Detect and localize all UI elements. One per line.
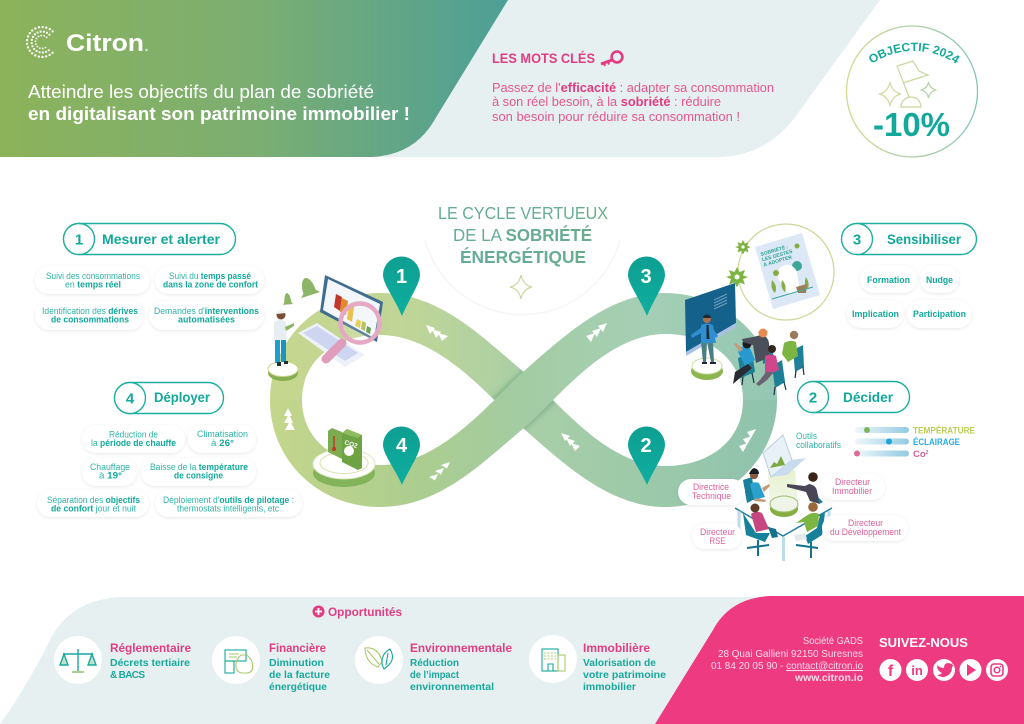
opportunity: immobilière: immobilier [583, 682, 636, 693]
panel: header gradient banner [0, 0, 508, 157]
pin 1 [383, 256, 420, 316]
arrow: right upward [739, 429, 756, 452]
social icons [880, 659, 1008, 681]
icon: keyboard [298, 323, 365, 367]
opportunity: financière: énergétique [269, 682, 327, 693]
legend: sliders: Co [913, 449, 926, 460]
opportunity: environnementale: environnemental [410, 682, 494, 693]
opportunity: financière: de la facture [269, 670, 330, 681]
arrow: bottom left [429, 462, 450, 480]
tag: en temps réel [65, 280, 121, 290]
heading: 3 sensibiliser [842, 224, 976, 254]
badge: objectif 2024 [846, 25, 978, 158]
heading: 2 décider: 2 [809, 390, 817, 406]
heading: 1 mesurer et alerter [64, 224, 236, 254]
tag [35, 266, 150, 294]
title circle decoration [425, 240, 620, 315]
icon: instagram [986, 659, 1008, 681]
tag [37, 490, 149, 517]
tag: de consommations [51, 314, 129, 326]
pin 2: 2 [640, 435, 652, 457]
legend: sliders [854, 426, 975, 460]
heading: 2 décider [798, 382, 910, 412]
panel: measure tags [35, 266, 264, 330]
tag: directeur RSE: RSE [710, 536, 726, 547]
tag: thermostats intelligents, etc [177, 504, 279, 514]
tag: Chauffage [90, 462, 130, 473]
legend: sliders: ÉCLAIRAGE [913, 437, 960, 448]
illustration: poster in circle: À ADOPTER [763, 254, 793, 268]
pin 4 [383, 426, 420, 485]
tag [35, 301, 144, 330]
icon: table [735, 508, 832, 536]
text block: key words definition: Passez de l'efficacité : adapter sa consommation [492, 80, 774, 95]
text block: contact details: www.citron.io [794, 672, 863, 684]
icon: scales [60, 649, 96, 672]
opportunity: réglementaire: Réglementaire [110, 641, 191, 655]
text block: contact details: 01 84 20 05 90 - contact@citron.io [711, 660, 863, 672]
tag: automatisées [178, 314, 235, 326]
tag: directeur RSE [692, 523, 742, 549]
icon: laptop [763, 435, 806, 477]
legend: sliders: 2 [926, 450, 929, 456]
chart: infinity cycle band [270, 293, 777, 507]
arrow: top right [586, 323, 607, 342]
heading: 2 décider: Décider [843, 390, 894, 405]
heading: 4 déployer [114, 382, 224, 414]
heading: 3 sensibiliser: 3 [853, 232, 861, 248]
badge: objectif 2024: -10% [873, 106, 950, 143]
icon: key [601, 52, 622, 66]
pin 4: 4 [396, 435, 408, 457]
tag: directeur du développement: du Développement [830, 527, 901, 538]
heading: main tagline: Atteindre les objectifs du plan de sobriété [28, 81, 374, 102]
icon: magnifier [326, 304, 380, 359]
tag: Baisse de la température [150, 462, 248, 473]
opportunity: réglementaire [54, 636, 191, 684]
tag [155, 490, 302, 517]
logo: Citron [27, 27, 148, 57]
tag: directeur immobilier: Directeur [835, 477, 870, 488]
title: le cycle vertueux: LE CYCLE VERTUEUX [438, 203, 608, 223]
tag: de confort jour et nuit [51, 504, 136, 514]
opportunity: immobilière [529, 635, 666, 693]
heading: opportunités: Opportunités [328, 605, 402, 619]
icon: person top left [743, 468, 770, 503]
icon: bells [282, 275, 320, 305]
opportunity: financière: Financière [269, 641, 326, 655]
legend: sliders: TEMPÉRATURE [913, 426, 975, 436]
opportunity: environnementale [355, 636, 512, 693]
panel: deploy tags [37, 425, 302, 517]
illustration: CO2 sensors on platform [313, 428, 375, 487]
icon: twitter [933, 659, 955, 681]
tag: directeur du développement [822, 515, 908, 541]
icon: buildings [542, 649, 565, 671]
tag: à 19° [99, 470, 122, 482]
icon: table platform [770, 496, 798, 517]
opportunity: réglementaire: Décrets tertiaire [110, 658, 190, 669]
tag: Implication [852, 309, 899, 320]
text block: contact details: 28 Quai Gallieni 92150 Suresnes [718, 648, 863, 660]
icon: platform [268, 362, 298, 381]
text block: contact details [711, 635, 863, 684]
icon: monitor [320, 275, 383, 342]
opportunity: environnementale: de l’impact [410, 670, 460, 681]
tag [155, 266, 264, 294]
tag: directrice technique [678, 479, 745, 505]
label: outils collaboratifs [796, 431, 841, 451]
opportunity: réglementaire: & BACS [110, 670, 145, 681]
arrow: left upward [284, 408, 295, 430]
tag: Participation [913, 309, 966, 320]
icon: person bottom left [743, 504, 778, 556]
logo: Citron: Citron [66, 30, 144, 57]
tag: de consigne [174, 470, 223, 482]
heading: 4 déployer: 4 [126, 390, 135, 408]
tag [82, 425, 185, 453]
opportunity: environnementale: Environnementale [410, 641, 512, 655]
tag: la période de chauffe [91, 438, 176, 449]
icon: person top right [787, 472, 823, 504]
tag: directrice technique: Technique [692, 491, 731, 502]
icon: flowers [726, 240, 751, 288]
pin 3 [628, 256, 665, 316]
illustration: poster in circle [726, 224, 834, 320]
icon: trainer platform [691, 358, 723, 380]
icon: invoice and money bag [225, 650, 253, 673]
icon: linkedin: in [911, 663, 923, 678]
icon: leaves [365, 648, 392, 669]
label: outils collaboratifs: collaboratifs [796, 440, 841, 451]
icon: trainer [691, 314, 718, 364]
tag: Nudge [926, 275, 953, 286]
tag: Formation [867, 275, 910, 286]
tag: à 26° [211, 438, 234, 449]
label: outils collaboratifs: Outils [796, 431, 817, 442]
icon: person bottom right [794, 502, 825, 558]
heading: les mots clés: LES MOTS CLÉS [492, 50, 595, 66]
tag [141, 458, 256, 486]
text block: key words definition: son besoin pour réduire sa consommation ! [492, 109, 740, 124]
illustration: poster in circle: LES GESTES [761, 249, 794, 263]
pin 1: 1 [396, 266, 407, 288]
illustration: poster in circle: SOBRIÉTÉ : [759, 242, 789, 258]
opportunity: immobilière: Immobilière [583, 641, 650, 655]
icon: audience [733, 328, 804, 395]
tag: directeur immobilier [820, 474, 885, 500]
tag: dans la zone de confort [163, 280, 259, 290]
heading: suivez-nous: SUIVEZ-NOUS [879, 635, 968, 650]
illustration: trainer and audience [685, 283, 804, 395]
icon: standing person [274, 309, 294, 366]
icon: title sparkle [510, 275, 532, 299]
tag [188, 425, 256, 453]
text block: contact details: Société GADS [803, 635, 863, 647]
icon: youtube [960, 659, 982, 681]
pin 2 [628, 426, 665, 485]
panel: awareness tags [847, 265, 972, 328]
illustration: meeting around table [735, 435, 832, 561]
heading: 1 mesurer et alerter: Mesurer et alerter [102, 232, 221, 247]
tag: directrice technique: Directrice [693, 482, 729, 493]
opportunity: environnementale: Réduction [410, 658, 459, 669]
icon: board [685, 283, 736, 356]
heading: 3 sensibiliser: Sensibiliser [887, 232, 962, 247]
tag [149, 301, 264, 330]
title: le cycle vertueux: ÉNERGÉTIQUE [460, 246, 586, 267]
tag: directeur immobilier: Immobilier [832, 486, 872, 497]
panel: footer opportunities background [0, 597, 780, 724]
text block: key words definition [492, 80, 774, 124]
heading: 4 déployer: Déployer [154, 390, 211, 405]
tag: directeur RSE: Directeur [700, 527, 735, 538]
heading: main tagline: en digitalisant son patrimoine immobilier ! [28, 103, 410, 124]
opportunity: financière: Diminution [269, 658, 324, 669]
tag: Déploiement d'outils de pilotage : [163, 495, 294, 506]
panel: key words background [370, 0, 880, 157]
icon: facebook: f [888, 663, 894, 680]
tag: Suivi des consommations [46, 271, 140, 282]
tag: Séparation des objectifs [47, 495, 140, 506]
heading: main tagline [28, 81, 410, 124]
opportunity: immobilière: Valorisation de [583, 658, 656, 669]
illustration: CO2 sensors on platform: CO2 [343, 439, 359, 450]
heading: 1 mesurer et alerter: 1 [75, 232, 83, 248]
text block: key words definition: à son réel besoin, à la sobriété : réduire [492, 94, 721, 109]
title: le cycle vertueux [438, 203, 608, 267]
pin 3: 3 [640, 266, 652, 288]
opportunity: immobilière: votre patrimoine [583, 670, 666, 681]
panel: footer contact background [655, 596, 1024, 724]
tag: Réduction de [109, 430, 158, 440]
badge: objectif 2024: OBJECTIF 2024 [869, 42, 960, 64]
illustration: person with monitor and magnifier [268, 275, 383, 381]
arrow: top left [426, 325, 448, 341]
tag: Demandes d'interventions [154, 306, 259, 317]
tag: Climatisation [197, 429, 248, 440]
opportunity: financière [212, 636, 330, 693]
title: le cycle vertueux: DE LA SOBRIÉTÉ [453, 224, 592, 245]
tag [82, 458, 137, 486]
tag: directeur du développement: Directeur [848, 518, 883, 529]
tag: Suivi du temps passé [169, 271, 251, 282]
tag: Identification des dérives [42, 306, 138, 317]
icon: flag and sparkles [879, 61, 936, 107]
arrow: bottom right [561, 433, 580, 451]
